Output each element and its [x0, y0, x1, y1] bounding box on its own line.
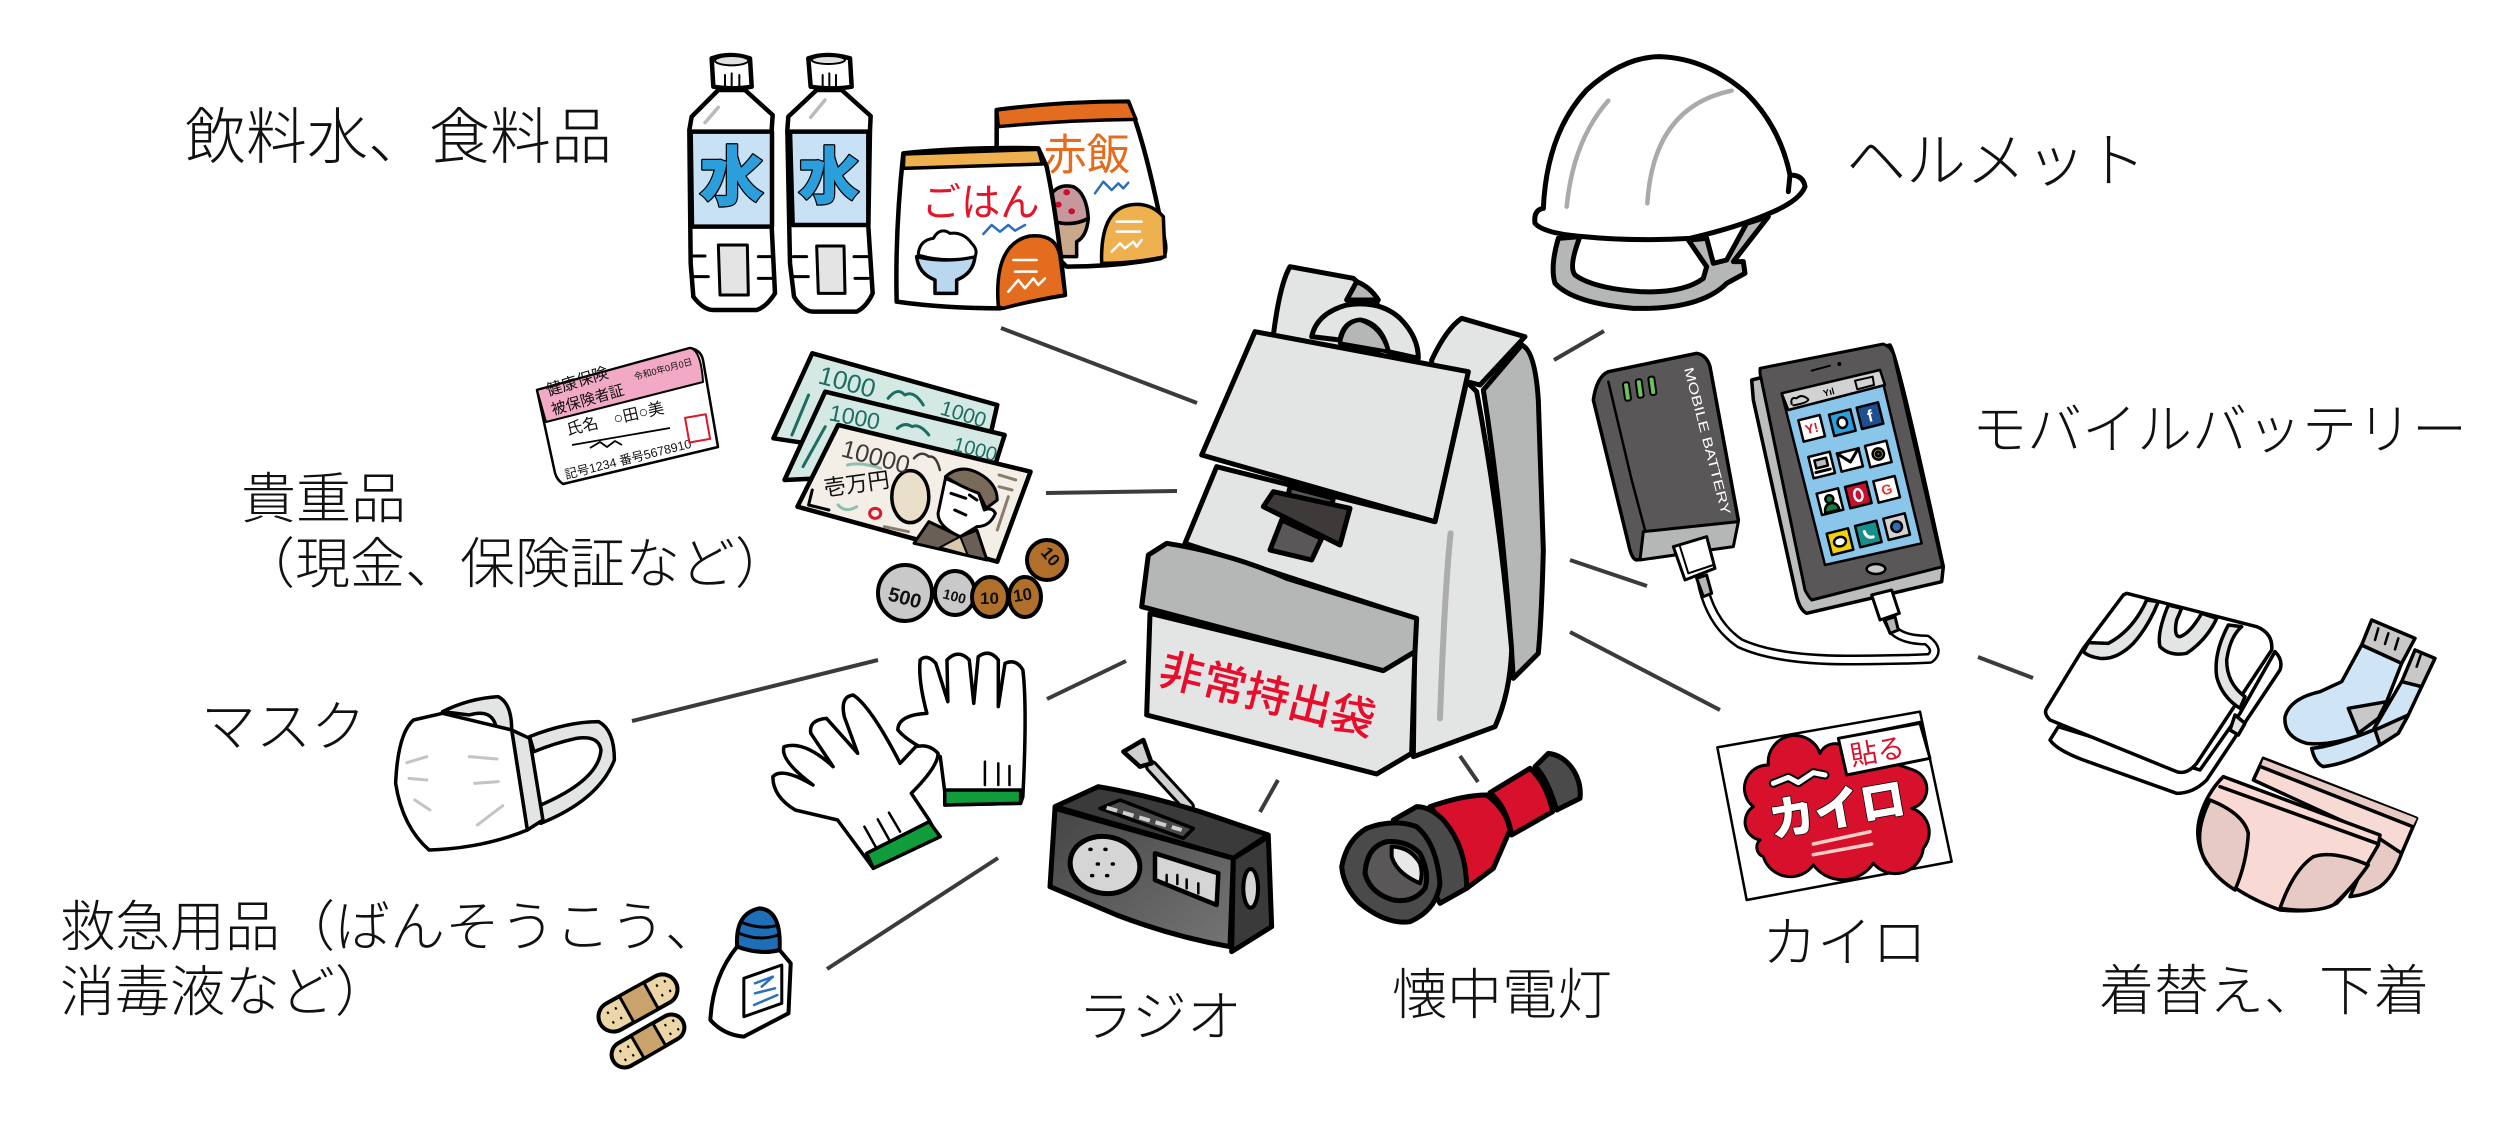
helmet shell [1535, 57, 1805, 240]
rice pack: red bean rice: 赤飯 [1043, 132, 1130, 180]
cable [1697, 575, 1934, 660]
water bottle right [787, 55, 873, 312]
smartphone [1752, 344, 1943, 620]
illustration: insurance card: 氏名 ○田○美 [565, 399, 666, 439]
speaker [1066, 831, 1144, 899]
illustration: adhesive bandages [593, 969, 689, 1072]
glove tilted [773, 695, 938, 868]
water bottle left [689, 55, 775, 310]
app icons: f [1865, 406, 1876, 426]
mobile battery: MOBILE BATTERY [1681, 366, 1734, 516]
app icons [1798, 402, 1910, 555]
label: valuables [240, 468, 790, 595]
illustration: insurance card [537, 348, 718, 484]
banknote middle [785, 392, 1005, 480]
illustration: backpack [1142, 267, 1543, 774]
coins: 10 [980, 589, 999, 608]
illustration: insurance card: 健康保険 [544, 364, 610, 400]
front pocket [1147, 613, 1415, 774]
backpack flap [1202, 332, 1468, 522]
app icons: Y! [1803, 420, 1820, 437]
flashlight lens [1392, 847, 1422, 883]
illustration: first aid bottle [710, 908, 791, 1037]
socks [2285, 620, 2435, 767]
briefs [2198, 758, 2417, 911]
illustration: banknotes: 1000 [827, 399, 882, 435]
label: valuables: 貴重品 [241, 468, 406, 530]
illustration: insurance card: 令和0年0月0日 [633, 356, 694, 382]
radio side [1232, 837, 1272, 952]
tuner display [1155, 853, 1218, 905]
illustration: work gloves [773, 653, 1025, 868]
label: first aid: 救急用品（ばんそうこう、 [60, 896, 720, 958]
left shoulder strap [1272, 267, 1383, 350]
illustration: banknotes: 1000 [938, 397, 989, 432]
illustration: helmet [1535, 57, 1805, 308]
flashlight band [1393, 807, 1467, 903]
illustration: banknotes: 1000 [951, 434, 999, 466]
illustration: clothes and underwear [2046, 593, 2435, 911]
coins: 10 [1012, 585, 1033, 606]
backpack side panel [1483, 345, 1543, 678]
label: radio: ラジオ [1078, 986, 1242, 1048]
radio top face [1055, 787, 1268, 858]
illustration: banknotes: 壱万円 [822, 467, 891, 501]
rice pack: gohan [896, 148, 1065, 308]
banknote front [797, 425, 1031, 562]
illustration: banknotes [773, 353, 1067, 621]
illustration: body warmer pack: カイロ [1765, 772, 1910, 847]
radio front [1050, 808, 1233, 947]
glove upright [898, 653, 1025, 805]
label: first aid [60, 896, 720, 1023]
highlight [1440, 533, 1451, 718]
sticker [1838, 723, 1930, 775]
flashlight tail [1535, 753, 1580, 810]
chin strap [1553, 217, 1768, 308]
water bottle left: 水 [699, 141, 764, 214]
label: water and food: 飲料水、食料品 [185, 103, 612, 171]
illustration: mobile battery and smartphone [1593, 344, 1943, 660]
flashlight head [1430, 795, 1510, 888]
right shoulder strap top [1432, 318, 1525, 385]
water bottle right: 水 [798, 143, 860, 212]
banknote back [773, 353, 997, 470]
illustration: body warmer pack [1717, 712, 1952, 900]
coins [878, 540, 1067, 621]
illustration: banknotes: 10000 [838, 435, 913, 480]
label: valuables: （現金、保険証など） [240, 533, 790, 595]
warmer red burst [1744, 736, 1929, 880]
coins: 500 [886, 584, 924, 613]
rice pack: red bean rice [997, 102, 1165, 267]
illustration: insurance card: 記号1234 番号5678910 [563, 437, 693, 482]
label: body warmer: カイロ [1762, 912, 1927, 974]
mobile battery [1593, 353, 1738, 580]
label: change of clothes: 着替え、下着 [2099, 960, 2429, 1022]
connector lines [632, 328, 2033, 969]
illustration: water bottles and rice packs [689, 55, 1165, 312]
portrait [914, 522, 987, 560]
rice pack: gohan: ごはん [922, 181, 1040, 225]
illustration: insurance card: 被保険者証 [549, 382, 626, 419]
label: mobile battery: モバイルバッテリー [1972, 399, 2467, 461]
handle loop [1312, 304, 1418, 358]
antenna [1152, 767, 1188, 807]
label: first aid: 消毒液など） [60, 961, 390, 1023]
label: helmet: ヘルメット [1846, 128, 2146, 195]
label: flashlight: 懐中電灯 [1392, 964, 1612, 1026]
app icons: G [1879, 480, 1894, 498]
backpack main body [1185, 382, 1512, 757]
illustration: radio [1050, 740, 1272, 952]
illustration: body warmer pack: 貼る [1848, 732, 1907, 772]
banknote text: 1000 [815, 360, 879, 404]
flashlight front ring [1342, 823, 1440, 922]
pocket text: 非常持出袋 [1155, 645, 1380, 746]
flashlight neck [1490, 768, 1553, 835]
illustration: mask [396, 697, 614, 850]
buckle [1287, 487, 1333, 513]
illustration: flashlight [1342, 753, 1580, 922]
smartphone: Yıl [1822, 386, 1836, 399]
pocket top flap [1142, 543, 1417, 671]
coins: 10 [1037, 543, 1064, 570]
folded undershirts [2046, 593, 2281, 793]
coins: 100 [941, 585, 968, 607]
label: mask: マスク [201, 696, 366, 758]
